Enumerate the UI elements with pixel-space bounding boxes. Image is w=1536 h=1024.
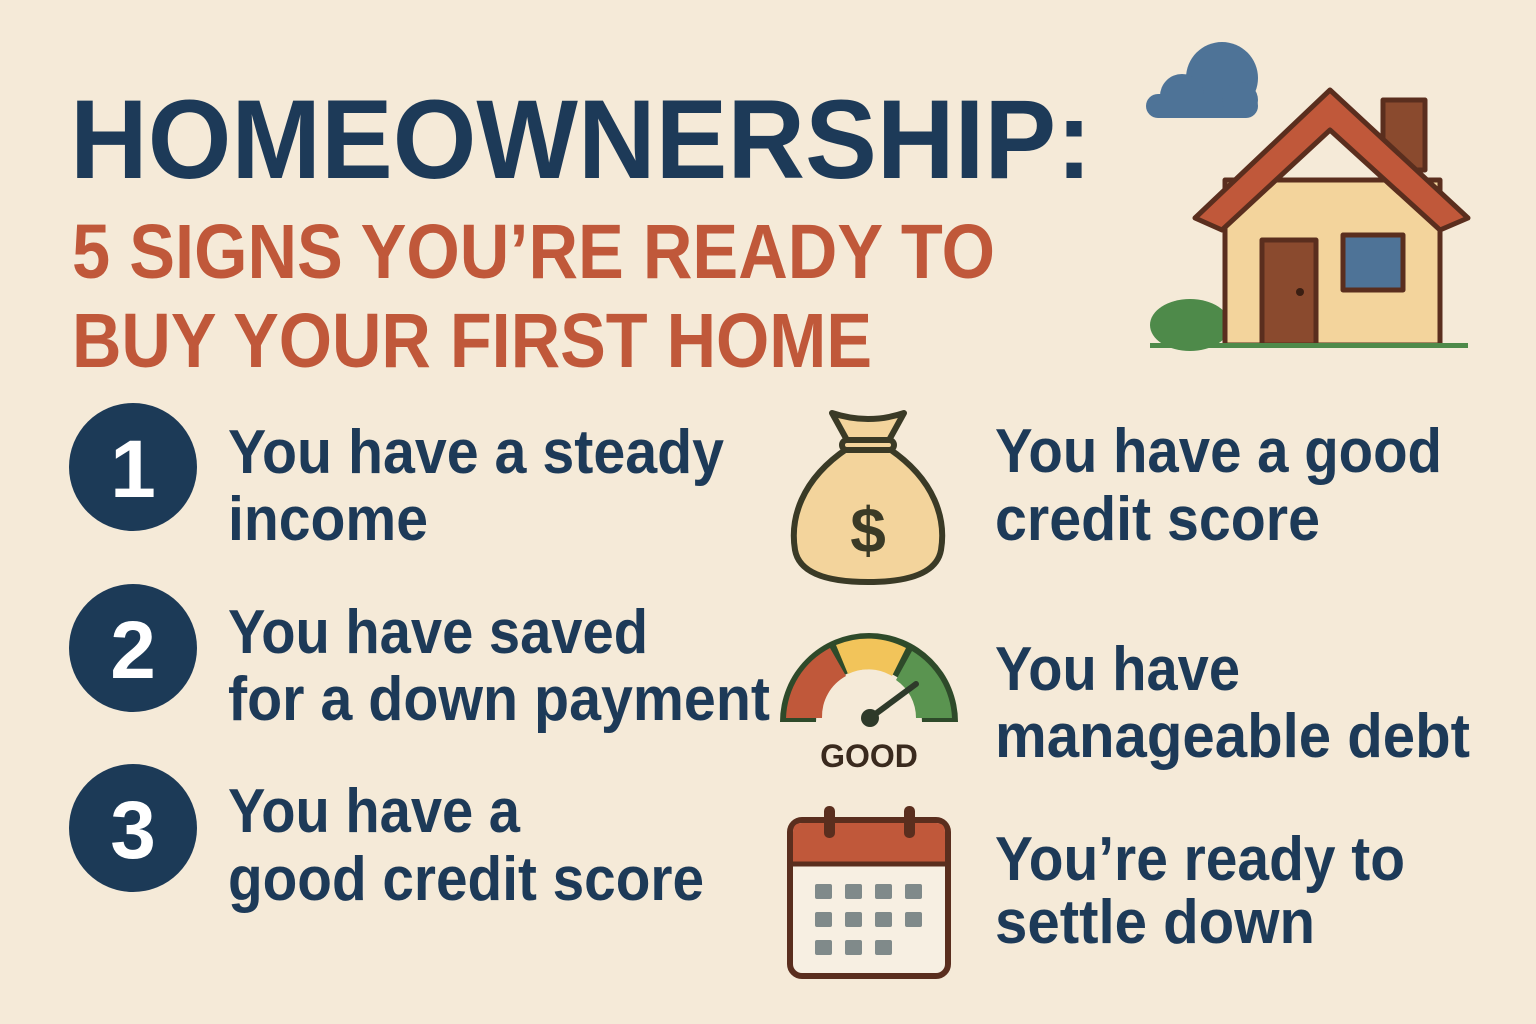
sign 5 text bbox=[995, 635, 1470, 771]
icon: cloud bbox=[1146, 42, 1258, 118]
sign 1: You have a steady bbox=[228, 418, 724, 487]
subtitle: 5 SIGNS YOU’RE READY TO bbox=[72, 209, 995, 295]
subtitle bbox=[72, 209, 995, 384]
sign 2: You have saved bbox=[228, 598, 648, 667]
sign 1: income bbox=[228, 485, 428, 554]
title: HOMEOWNERSHIP: bbox=[70, 77, 1092, 202]
icon: money bag: $ bbox=[850, 494, 886, 566]
sign 3 bbox=[69, 764, 704, 914]
sign 4 text: credit score bbox=[995, 485, 1320, 554]
sign 1: 1 bbox=[110, 424, 156, 515]
sign 4 text: You have a good bbox=[995, 417, 1442, 486]
icon: credit gauge: GOOD bbox=[820, 738, 918, 774]
icon: credit gauge bbox=[780, 633, 958, 774]
sign 6 text: settle down bbox=[995, 888, 1315, 957]
sign 6 text: You’re ready to bbox=[995, 825, 1405, 894]
sign 4 text bbox=[995, 417, 1442, 554]
sign 5 text: manageable debt bbox=[995, 702, 1470, 771]
subtitle: BUY YOUR FIRST HOME bbox=[72, 298, 872, 384]
sign 2: 2 bbox=[110, 605, 156, 696]
icon: money bag bbox=[794, 413, 942, 582]
sign 3: You have a bbox=[228, 777, 520, 846]
sign 2 bbox=[69, 584, 770, 734]
sign 3: good credit score bbox=[228, 845, 704, 914]
sign 5 text: You have bbox=[995, 635, 1240, 704]
sign 2: for a down payment bbox=[228, 665, 770, 734]
sign 6 text bbox=[995, 825, 1405, 957]
icon: house bbox=[1150, 90, 1468, 351]
sign 1 bbox=[69, 403, 724, 554]
icon: calendar bbox=[790, 806, 948, 976]
sign 3: 3 bbox=[110, 785, 156, 876]
